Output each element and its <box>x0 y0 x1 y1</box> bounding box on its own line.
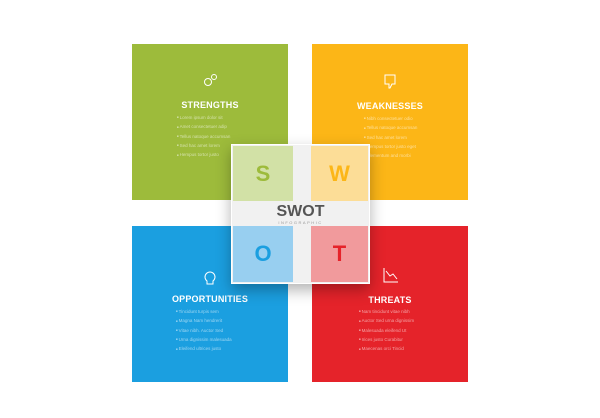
list: threats: Nam tincidunt vitae nibh <box>362 309 410 314</box>
panel: weaknesses <box>312 44 468 200</box>
list: opportunities: Eleifend ultrices justo <box>179 346 221 351</box>
list: strengths <box>177 115 230 157</box>
panel: strengths <box>132 44 288 200</box>
list: threats: Maecenas orci Tincid <box>362 346 404 351</box>
title: SWOT: SWOT <box>276 203 324 220</box>
heading: strengths: STRENGTHS <box>181 100 239 110</box>
tile: S: S <box>256 160 270 186</box>
list: weaknesses: Hempus tortor justo eget <box>367 144 416 149</box>
list: weaknesses: Sed hac amet lorem <box>367 135 407 140</box>
list: threats: Irices justo Curabitur <box>362 337 403 342</box>
list: opportunities: Urna dignissim malesuada <box>179 337 232 342</box>
list: strengths: Hempus tortor justo <box>180 152 219 157</box>
heading: opportunities: OPPORTUNITIES <box>172 294 248 304</box>
heading: threats: THREATS <box>368 295 412 305</box>
list: strengths: Lorem ipsum dolor sit <box>180 115 223 120</box>
tile: O <box>233 226 293 282</box>
list: opportunities: Tincidunt turpis sem <box>179 309 219 314</box>
center card <box>231 144 370 284</box>
list: weaknesses: Elementum and morbi <box>367 153 411 158</box>
list: strengths: Tellus natoque accumsan <box>180 134 230 139</box>
list: threats: Auctor Sed urna dignissim <box>362 318 414 323</box>
tile: O: O <box>254 241 272 266</box>
list: weaknesses: Nibh consectetuer odio <box>367 116 413 121</box>
list: opportunities: Magna Nam hendrerit <box>179 318 222 323</box>
list: opportunities <box>176 309 232 351</box>
list: weaknesses <box>364 116 418 158</box>
list: opportunities: Vitae nibh. Auctor Sed <box>179 328 223 333</box>
list: strengths: Sed hac amet lorem <box>180 143 220 148</box>
subtitle: INFOGRAPHIC <box>278 220 323 225</box>
tile: T: T <box>333 241 346 266</box>
icon: thumbs down <box>384 74 396 88</box>
panel: opportunities <box>132 226 288 382</box>
tile: W <box>311 146 368 201</box>
list: weaknesses: Tellus natoque accumsan <box>367 125 417 130</box>
icon: bulb <box>204 272 216 284</box>
heading: weaknesses: WEAKNESSES <box>357 101 423 111</box>
panel: threats <box>312 226 468 382</box>
list: threats <box>359 309 414 351</box>
tile: T <box>311 226 368 282</box>
tile: S <box>233 146 293 201</box>
tile: W: W <box>329 160 350 186</box>
list: threats: Malesuada eleifend Ut <box>362 328 406 333</box>
icon: gears <box>204 74 217 86</box>
icon: chart down <box>384 268 398 282</box>
list: strengths: Amet consectetuer adip <box>180 124 227 129</box>
